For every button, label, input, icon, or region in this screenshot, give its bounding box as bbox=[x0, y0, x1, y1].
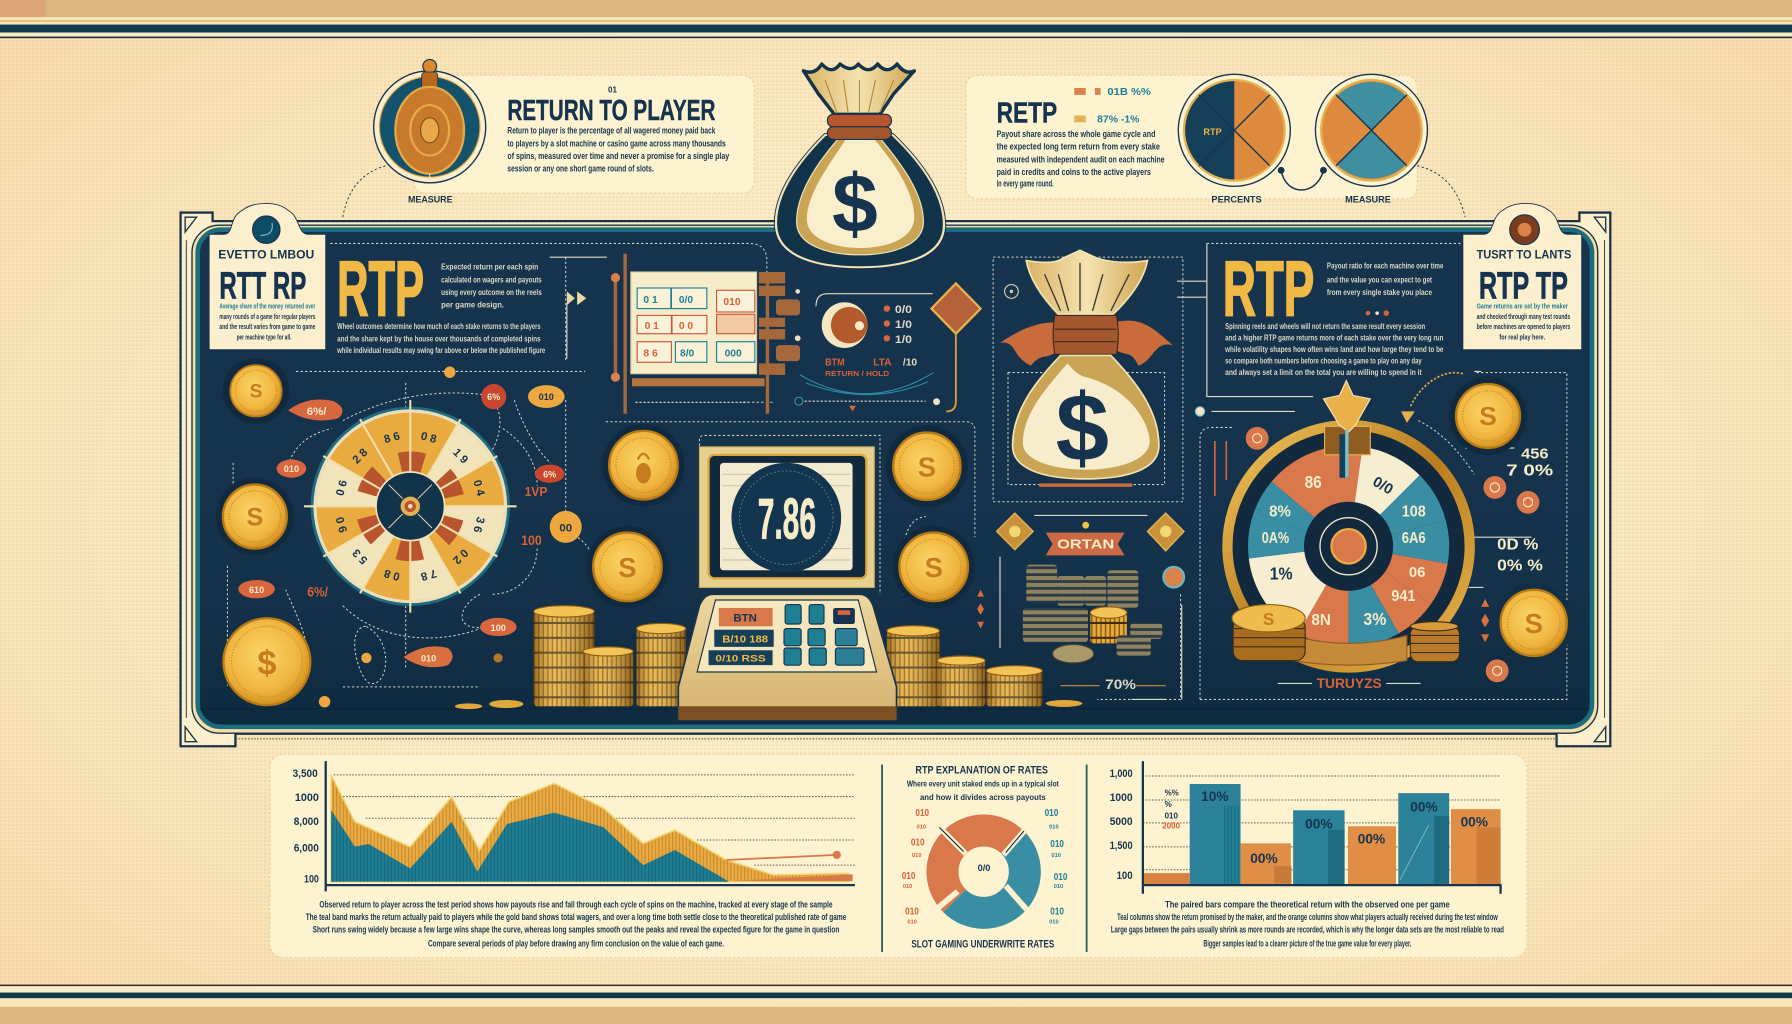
text block: left RTP long: while individual results may swing far above or below the published figure bbox=[336, 345, 545, 355]
dashed guide lines bbox=[227, 243, 1567, 699]
callouts: wheel tags: 1VP bbox=[525, 485, 547, 499]
small legend: %% bbox=[1165, 788, 1179, 797]
text block: right RTP short: from every single stake you place bbox=[1327, 287, 1432, 297]
labels: donut left: 010 bbox=[907, 919, 917, 925]
card: right title bbox=[1463, 203, 1582, 350]
text block: bar chart caption: Large gaps between the pairs usually shrink as more rounds are recorded, which is why the longer data sets are the most reliable to read bbox=[1111, 925, 1504, 935]
text: right percentages: 7 0% bbox=[1506, 462, 1553, 479]
label: icon caption: MEASURE bbox=[408, 194, 453, 204]
heading: RETP: RETP bbox=[997, 97, 1057, 129]
text block: right RTP long: Spinning reels and wheels will not return the same result every session bbox=[1225, 321, 1425, 331]
icon: slot machine bbox=[678, 447, 897, 720]
bar value labels: 00% bbox=[1461, 814, 1488, 829]
icon: slot paytable board bbox=[611, 254, 800, 414]
axis labels: 100 bbox=[1117, 870, 1133, 882]
panel: mini payout key bbox=[795, 283, 981, 411]
banner: diamonds and ribbon: ORTAN bbox=[1057, 538, 1114, 552]
coins: right side bbox=[1449, 377, 1574, 663]
text block: left RTP short: calculated on wagers and payouts bbox=[441, 274, 542, 284]
chart: left roulette wheel: 1 9 bbox=[450, 447, 470, 466]
icon: three dots bbox=[1366, 310, 1389, 316]
labels: donut left: 010 bbox=[902, 871, 916, 882]
text block: card body: Average share of the money returned over bbox=[219, 302, 315, 311]
text: key values bbox=[825, 358, 917, 378]
icon: bronze medal bbox=[374, 59, 486, 183]
chart: left roulette wheel: 0 4 bbox=[470, 479, 486, 498]
list: bullet percentages: 1/0 bbox=[895, 319, 912, 331]
text block: card body: for real play here. bbox=[1499, 332, 1545, 341]
heading: left RTP: RTP bbox=[337, 246, 424, 332]
machine console: 0/10 RSS bbox=[715, 654, 766, 664]
icon: slider dot bbox=[1195, 407, 1205, 416]
dollar sign: $ bbox=[832, 159, 878, 250]
coins: machine side bbox=[586, 424, 975, 608]
legend: 87% -1% bbox=[1097, 114, 1139, 125]
chart: left roulette wheel: 2 8 bbox=[351, 447, 370, 466]
text block: bar chart caption: Teal columns show the return promised by the maker, and the orange columns show what players actually received during the test window bbox=[1117, 912, 1498, 922]
bar value labels: 10% bbox=[1201, 789, 1229, 804]
icon: crescent gauge bbox=[822, 302, 867, 348]
text block: RETP explanation: Payout share across the whole game cycle and bbox=[997, 129, 1155, 139]
wheel pointer bbox=[1323, 381, 1370, 478]
axis labels: 8,000 bbox=[294, 816, 319, 828]
callouts: wheel tags: 010 bbox=[539, 392, 554, 402]
labels: donut right: 010 bbox=[1050, 906, 1064, 917]
icon: thin pins bbox=[1215, 441, 1226, 496]
panel: return to player header bbox=[374, 59, 754, 204]
text block: area chart caption: Compare several periods of play before drawing any firm conclusion on the value of each game. bbox=[428, 938, 724, 948]
pie chart: teal and orange bbox=[1315, 74, 1427, 186]
text block: donut intro: and how it divides across payouts bbox=[920, 792, 1046, 802]
labels: donut right: 010 bbox=[1051, 853, 1061, 859]
card: left title bbox=[209, 203, 326, 350]
text block: left RTP short bbox=[441, 262, 542, 309]
text block: left RTP long: and the share kept by the house over thousands of completed spins bbox=[337, 334, 541, 344]
chart: left roulette wheel: 0 2 bbox=[450, 546, 470, 566]
text block: right RTP long: and a higher RTP game returns more of each stake over the very long run bbox=[1225, 333, 1443, 343]
machine console: B/10 188 bbox=[722, 634, 768, 645]
icon: diamond sign bbox=[931, 283, 981, 411]
text block: left RTP short: Expected return per each spin bbox=[441, 262, 538, 272]
small legend: 2000 bbox=[1162, 822, 1181, 831]
text block: definition: to players by a slot machine or casino game across many thousands bbox=[507, 138, 726, 148]
callouts: wheel tags: 100 bbox=[491, 623, 506, 633]
text block: RETP explanation bbox=[997, 129, 1165, 188]
text block: left RTP short: per game design. bbox=[441, 299, 504, 309]
icon: slot paytable board: 0 0 bbox=[679, 321, 693, 332]
chart: left roulette wheel: 0 6 bbox=[334, 479, 350, 497]
chart: left roulette wheel: 3 6 bbox=[470, 515, 486, 534]
wheel base bbox=[1293, 635, 1407, 665]
chart: right prize wheel: 6A6 bbox=[1402, 530, 1426, 547]
labels: donut right: 010 bbox=[1050, 839, 1064, 850]
solid guide lines bbox=[550, 243, 1531, 699]
chart: right prize wheel: 0A% bbox=[1262, 530, 1289, 547]
chart: bar chart bbox=[1110, 761, 1504, 948]
bottom border band bbox=[0, 985, 1792, 1024]
text block: right RTP long bbox=[1224, 321, 1444, 377]
chart: right prize wheel: 86 bbox=[1305, 472, 1322, 492]
chart: donut explanation bbox=[881, 765, 1088, 952]
chart: left roulette wheel: 0 8 bbox=[383, 566, 401, 582]
text block: right RTP long: while volatility shapes how often wins land and how large they tend to be bbox=[1224, 344, 1444, 354]
coin stacks: left of machine bbox=[455, 606, 686, 709]
callouts: wheel tags: 6% bbox=[543, 470, 556, 480]
icon: bronze seal bbox=[1510, 215, 1539, 245]
heading: donut title: RTP EXPLANATION OF RATES bbox=[915, 765, 1048, 777]
panel: main dark frame bbox=[181, 213, 1610, 746]
labels: donut right bbox=[1045, 808, 1068, 925]
heading: card title: RTP TP bbox=[1479, 264, 1568, 306]
legend: 01B %% bbox=[1107, 87, 1151, 98]
label: pile percentage bbox=[1061, 677, 1166, 692]
list: bullet percentages bbox=[884, 304, 912, 346]
text: right percentages: 0% % bbox=[1497, 557, 1543, 574]
coin stack: wheel left bbox=[1232, 605, 1305, 661]
text block: definition: of spins, measured over time and never a promise for a single play bbox=[507, 151, 730, 161]
labels: donut right: 010 bbox=[1049, 825, 1059, 831]
labels: donut right: 010 bbox=[1054, 884, 1063, 890]
bar value labels: 00% bbox=[1358, 831, 1385, 846]
connector between pies bbox=[1278, 167, 1327, 190]
chart: right prize wheel: 06 bbox=[1409, 565, 1425, 581]
text: right percentages bbox=[1497, 446, 1553, 574]
coins: left column: S bbox=[250, 381, 263, 403]
arrows: vertical markers bbox=[977, 590, 984, 629]
text block: definition: Return to player is the percentage of all wagered money paid back bbox=[507, 126, 716, 136]
icon: orange dot bbox=[1163, 567, 1184, 587]
coin piles: dark stacks bbox=[1023, 565, 1162, 663]
pie chart: navy and orange bbox=[1178, 74, 1290, 186]
chart: right prize wheel: 3% bbox=[1363, 609, 1386, 629]
text block: area chart caption bbox=[306, 899, 846, 948]
label: card kicker: EVETTO LMBOU bbox=[218, 247, 314, 261]
chart: right prize wheel: 8N bbox=[1311, 612, 1331, 629]
text block: bar chart caption bbox=[1111, 899, 1504, 948]
text block: definition bbox=[507, 126, 730, 173]
coins: machine side: S bbox=[618, 552, 637, 583]
text block: area chart caption: Observed return to player across the test period shows how payouts rise and fall through each cycle of spins on the machine, tracked at every stage of the sample bbox=[319, 899, 833, 909]
text block: right RTP short bbox=[1327, 261, 1444, 297]
text block: card body: Game returns are set by the maker bbox=[1477, 302, 1568, 311]
axis labels: 1000 bbox=[295, 792, 319, 804]
bar value labels: 00% bbox=[1250, 851, 1278, 866]
panel: RETP header with pies bbox=[966, 74, 1427, 204]
dotted rule under board bbox=[635, 401, 749, 403]
coin stack: wheel right bbox=[1410, 622, 1459, 662]
label: pile percentage: 70% bbox=[1105, 677, 1136, 692]
labels: donut left: 010 bbox=[905, 906, 919, 917]
text block: RETP explanation: measured with independent audit on each machine bbox=[997, 154, 1165, 164]
callouts: wheel tags: 00 bbox=[559, 522, 572, 534]
list: bullet percentages: 1/0 bbox=[895, 334, 912, 346]
label: pie caption one: PERCENTS bbox=[1211, 194, 1262, 204]
icon: large money bag right bbox=[1000, 250, 1173, 487]
machine console: BTN bbox=[733, 613, 757, 625]
machine screen bbox=[699, 447, 874, 587]
arrow: blue swoosh bbox=[800, 373, 934, 395]
arrows: right vertical markers bbox=[1481, 599, 1489, 642]
coins: right side: S bbox=[1479, 401, 1497, 431]
coin stack: wheel left: S bbox=[1263, 609, 1274, 629]
arrow: curved gold bbox=[1401, 373, 1474, 474]
icon: slot paytable board: 8 6 bbox=[643, 349, 658, 360]
axis labels: 1,500 bbox=[1110, 840, 1133, 852]
pie chart: navy and orange: RTP bbox=[1203, 127, 1222, 137]
callouts: wheel tags bbox=[238, 367, 582, 707]
coins: left column: $ bbox=[257, 644, 276, 682]
icon: slot paytable board: 0 1 bbox=[645, 321, 659, 332]
chart: right prize wheel bbox=[1227, 381, 1470, 667]
chart: left roulette wheel: 9 0 bbox=[334, 515, 350, 534]
labels: donut left: 010 bbox=[911, 838, 925, 849]
axis labels bbox=[1110, 768, 1133, 882]
text block: card body: per machine type for all. bbox=[237, 332, 291, 341]
axis labels: 1000 bbox=[1110, 792, 1133, 804]
text block: card body: many rounds of a game for regular players bbox=[219, 312, 315, 321]
text block: RETP explanation: paid in credits and coins to the active players bbox=[997, 167, 1151, 177]
callouts: wheel tags: 610 bbox=[249, 585, 264, 595]
label: card kicker: TUSRT TO LANTS bbox=[1477, 247, 1571, 261]
coins: machine side: S bbox=[918, 452, 936, 483]
icon: play arrows bbox=[567, 291, 586, 305]
bar value labels bbox=[1201, 789, 1488, 866]
dollar sign: $ bbox=[1056, 375, 1109, 482]
axis labels: 6,000 bbox=[294, 842, 319, 854]
text: right percentages: 0D % bbox=[1497, 537, 1538, 554]
labels: donut left: 010 bbox=[903, 884, 912, 890]
coins: left column: S bbox=[246, 504, 263, 532]
chart: left roulette wheel: 5 3 bbox=[351, 546, 370, 566]
callouts: wheel tags: 6%/ bbox=[307, 585, 328, 600]
chart: right prize wheel: 1% bbox=[1270, 563, 1293, 583]
heading: right RTP: RTP bbox=[1223, 246, 1314, 332]
label: donut caption: SLOT GAMING UNDERWRITE RATES bbox=[911, 938, 1055, 950]
small legend: 010 bbox=[1165, 811, 1178, 820]
chart: right prize wheel: 8% bbox=[1269, 504, 1291, 521]
text block: RETP explanation: in every game round. bbox=[997, 178, 1054, 188]
coin stacks: right of machine bbox=[887, 626, 1082, 707]
icon: teal seal bbox=[253, 216, 280, 243]
text block: left RTP short: using every outcome on the reels bbox=[441, 287, 542, 297]
axis labels bbox=[293, 768, 319, 885]
icon: slot paytable board: 8/0 bbox=[680, 349, 695, 360]
labels: donut left bbox=[902, 808, 929, 925]
callouts: wheel tags: 100 bbox=[521, 533, 542, 548]
text block: bar chart caption: The paired bars compare the theoretical return with the observed one per game bbox=[1165, 899, 1450, 909]
chart: right prize wheel: 941 bbox=[1391, 588, 1416, 605]
panel: bottom charts bbox=[270, 754, 1527, 958]
chart: left roulette wheel bbox=[304, 400, 517, 613]
callouts: wheel tags: 010 bbox=[284, 464, 299, 474]
text block: area chart caption: Short runs swing widely because a few large wins shape the curve, whereas long samples smooth out the peaks and reveal the expected figure for the game in question bbox=[313, 925, 840, 935]
text block: donut intro bbox=[907, 778, 1059, 802]
text block: card body: and the result varies from game to game bbox=[219, 322, 316, 331]
chart: right prize wheel: 0/0 bbox=[1370, 474, 1396, 498]
chart: area chart bbox=[293, 761, 855, 948]
small legend bbox=[1162, 788, 1181, 831]
coins: left column bbox=[216, 358, 310, 705]
icon: central money bag bbox=[774, 64, 946, 269]
feathers bbox=[1000, 321, 1173, 366]
icon: slot paytable board: 010 bbox=[723, 297, 741, 308]
top border band bbox=[0, 0, 1792, 38]
heading: return to player: RETURN TO PLAYER bbox=[507, 95, 716, 127]
axis labels: 100 bbox=[304, 873, 319, 885]
text block: card body: and checked through many test rounds bbox=[1477, 312, 1570, 321]
axis labels: 3,500 bbox=[293, 768, 318, 780]
callouts: wheel tags: 6%/ bbox=[307, 406, 327, 418]
labels: donut right: 010 bbox=[1045, 808, 1059, 819]
text block: definition: session or any one short game round of slots. bbox=[507, 163, 654, 173]
decorative side curves of header bbox=[343, 166, 1465, 217]
text block: left RTP long bbox=[336, 321, 545, 355]
text: key values: /10 bbox=[903, 358, 917, 369]
bar value labels: 00% bbox=[1305, 817, 1333, 832]
callouts: wheel tags: 010 bbox=[421, 654, 436, 664]
axis labels: 1,000 bbox=[1110, 768, 1133, 780]
text: key values: RETURN / HOLD bbox=[825, 369, 890, 378]
icons: orange dots bbox=[1246, 427, 1539, 682]
axis labels: 5000 bbox=[1110, 816, 1133, 828]
labels: donut right: 010 bbox=[1049, 919, 1059, 925]
machine console bbox=[678, 594, 897, 720]
text block: right RTP long: and always set a limit on the total you are willing to spend in it bbox=[1225, 367, 1422, 377]
labels: donut left: 010 bbox=[912, 853, 922, 859]
stat: screen value: 7.86 bbox=[758, 487, 816, 551]
chart: left roulette wheel: 8 6 bbox=[383, 430, 401, 446]
text block: card body: before machines are opened to players bbox=[1477, 322, 1570, 331]
list: bullet percentages: 0/0 bbox=[895, 304, 912, 316]
label: pie caption two: MEASURE bbox=[1345, 194, 1391, 204]
callouts: wheel tags: 6% bbox=[487, 392, 500, 402]
legend bbox=[1074, 87, 1151, 125]
label: section number: 01 bbox=[608, 86, 617, 95]
labels: donut left: 010 bbox=[915, 808, 929, 819]
label: donut centre: 0/0 bbox=[978, 863, 990, 873]
text block: card body bbox=[219, 302, 316, 341]
text block: right RTP short: Payout ratio for each machine over time bbox=[1327, 261, 1444, 271]
text block: donut intro: Where every unit staked ends up in a typical slot bbox=[907, 778, 1059, 788]
chart: left roulette wheel: 0 8 bbox=[419, 430, 438, 446]
chart: right prize wheel: 108 bbox=[1402, 504, 1426, 521]
icon: slot paytable board: 0/0 bbox=[679, 295, 693, 306]
coins: machine side: S bbox=[925, 552, 943, 583]
text block: bar chart caption: Bigger samples lead to a clearer picture of the true game value for every player. bbox=[1203, 938, 1411, 948]
label: wheel caption: TURUYZS bbox=[1317, 676, 1382, 691]
chart: left roulette wheel: 7 8 bbox=[419, 566, 438, 582]
text block: right RTP long: so compare both numbers before choosing a game to play on any day bbox=[1225, 355, 1422, 365]
text: key values: LTA bbox=[873, 358, 892, 369]
bar value labels: 00% bbox=[1410, 799, 1438, 814]
icon: slot paytable board: 0 1 bbox=[643, 295, 658, 306]
text: right percentages: 456 bbox=[1521, 446, 1549, 462]
labels: donut left: 010 bbox=[917, 825, 926, 831]
heading: card title: RTT RP bbox=[219, 264, 306, 306]
text block: card body bbox=[1477, 302, 1570, 341]
text block: left RTP long: Wheel outcomes determine how much of each stake returns to the players bbox=[337, 321, 541, 331]
text block: RETP explanation: the expected long term return from every stake bbox=[997, 142, 1160, 152]
small legend: % bbox=[1165, 800, 1172, 809]
text block: area chart caption: The teal band marks the return actually paid to players while the gold band shows total wagers, and over a long time both settle close to the theoretical published rate of game bbox=[306, 912, 846, 922]
icon: slot paytable board: 000 bbox=[725, 349, 742, 360]
labels: donut right: 010 bbox=[1054, 872, 1068, 883]
text block: right RTP short: and the value you can expect to get bbox=[1327, 274, 1432, 284]
coins: right side: S bbox=[1525, 608, 1543, 639]
banner: diamonds and ribbon bbox=[997, 513, 1184, 555]
text: key values: BTM bbox=[825, 358, 845, 369]
